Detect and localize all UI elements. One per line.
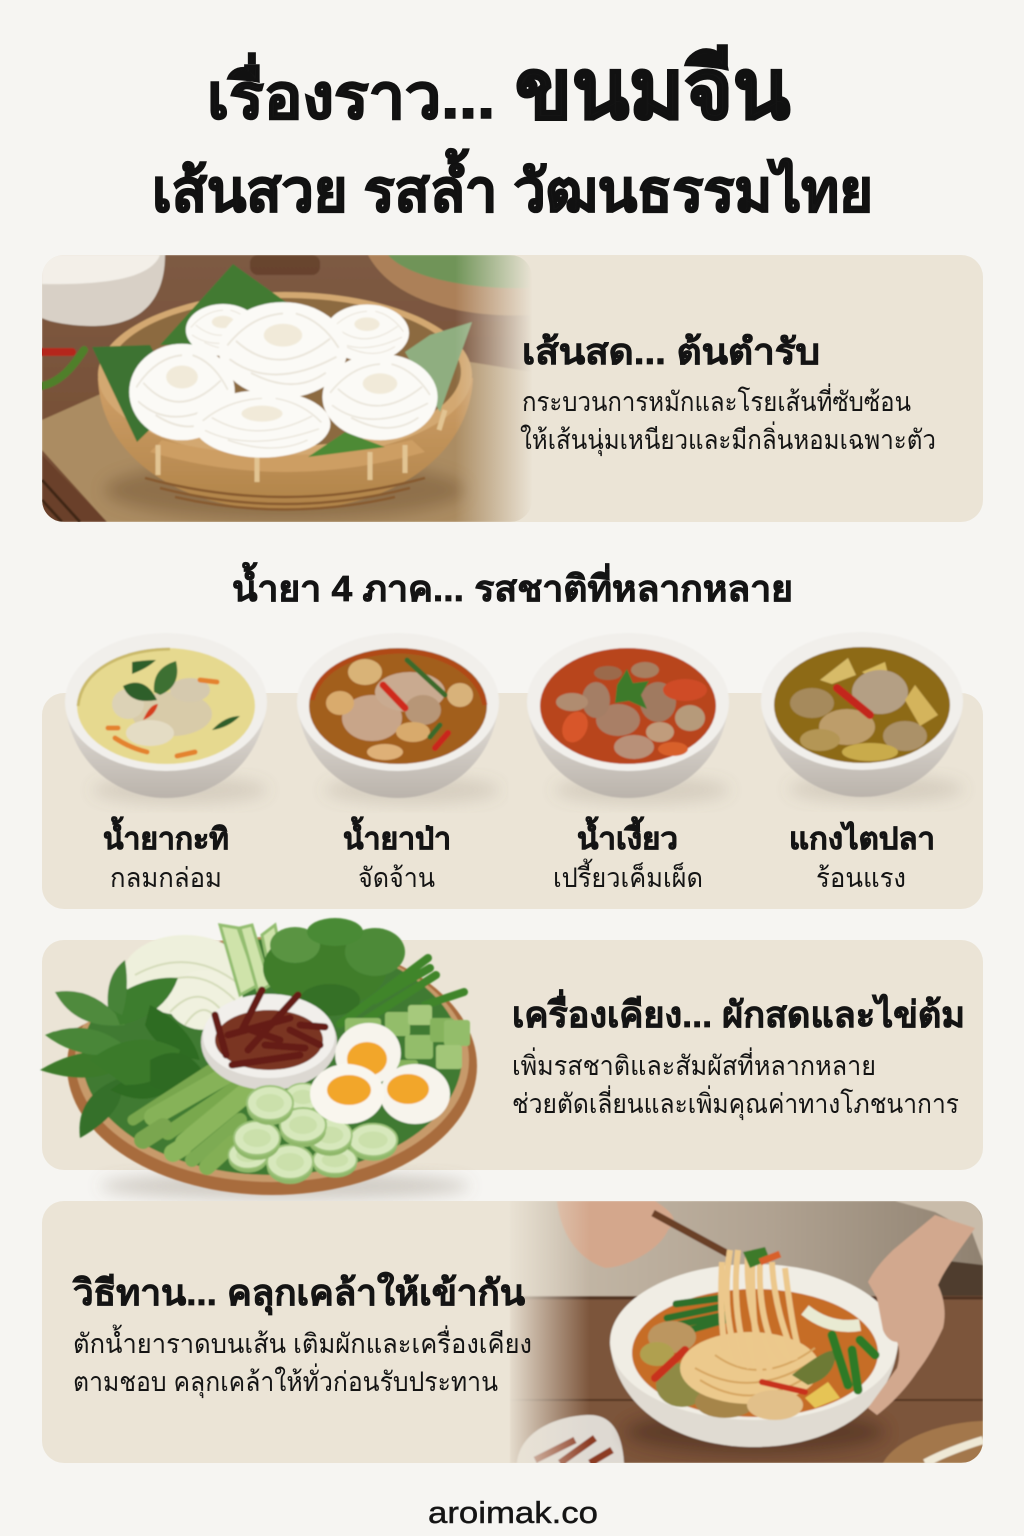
sauce bowl with dried chilies: [201, 990, 337, 1090]
label: jungle curry: น้ำยาป่า: [343, 816, 451, 856]
heading: เส้นสด... ต้นตำรับ: [522, 331, 820, 372]
left hand and chopsticks: [557, 1201, 674, 1268]
small chili bowl: [517, 1415, 624, 1463]
cubed vegetables: [345, 1005, 470, 1078]
title: ขนมจีน: [515, 42, 790, 136]
bowl: nam ngiao: [527, 633, 730, 804]
body text: ตามชอบ คลุกเคล้าให้ทั่วก่อนรับประทาน: [73, 1363, 498, 1399]
heading: วิธีทาน... คลุกเคล้าให้เข้ากัน: [72, 1271, 525, 1316]
label: jungle curry: [343, 816, 451, 893]
footer: website: aroimak.co: [428, 1495, 598, 1530]
curry bowl: [625, 1410, 885, 1454]
panel: side vegetables: [40, 918, 983, 1200]
label: tai pla: แกงไตปลา: [789, 821, 935, 856]
label: coconut curry: [103, 816, 229, 893]
cucumber spears: [220, 925, 285, 995]
body text: ตักน้ำยาราดบนเส้น เติมผักและเครื่องเคียง: [73, 1324, 532, 1359]
photo: mixing bowl: [510, 1201, 983, 1463]
body text: ช่วยตัดเลี่ยนและเพิ่มคุณค่าทางโภชนาการ: [512, 1085, 959, 1121]
bowl: tai pla: [761, 632, 964, 803]
body text: เพิ่มรสชาติและสัมผัสที่หลากหลาย: [512, 1047, 876, 1081]
label: nam ngiao: [553, 816, 703, 893]
label: nam ngiao: เปรี้ยวเค็มเผ็ด: [553, 858, 703, 893]
body text: [73, 1324, 532, 1399]
cabbage: [123, 935, 247, 1030]
body text: [520, 383, 936, 457]
photo: vegetable plate: [40, 918, 477, 1200]
basket: [98, 378, 473, 510]
panel: fresh noodles: [42, 255, 983, 522]
bowl: coconut curry: [65, 633, 268, 804]
lifted noodles: [721, 1250, 800, 1375]
title: [152, 42, 873, 224]
wooden plate and sprouts: [883, 1421, 983, 1463]
label: coconut curry: กลมกล่อม: [110, 863, 222, 893]
long beans: [340, 958, 464, 1030]
label: jungle curry: จัดจ้าน: [358, 863, 435, 893]
herbs: [263, 918, 405, 1016]
noodle nests: [184, 302, 248, 357]
label: tai pla: ร้อนแรง: [816, 863, 906, 893]
photo: noodle basket: [42, 255, 532, 522]
label: nam ngiao: น้ำเงี้ยว: [577, 816, 678, 856]
bowl: jungle curry: [297, 633, 500, 804]
right hand and arm: [868, 1215, 975, 1415]
body text: กระบวนการหมักและโรยเส้นที่ซับซ้อน: [522, 383, 911, 417]
cucumber slices: [228, 1083, 397, 1184]
label: tai pla: [789, 821, 935, 893]
banana leaves: [160, 264, 290, 345]
title: เรื่องราว...: [207, 53, 495, 132]
panel: how to eat: [42, 1201, 983, 1463]
section heading: curries: น้ำยา 4 ภาค... รสชาติที่หลากหลาย: [232, 562, 793, 609]
heading: เครื่องเคียง... ผักสดและไข่ต้ม: [512, 989, 965, 1035]
title: เส้นสวย รสล้ำ วัฒนธรรมไทย: [152, 149, 873, 224]
body text: [512, 1047, 959, 1121]
bean segments: [133, 1070, 253, 1167]
panel: four curries: [42, 632, 983, 909]
body text: ให้เส้นนุ่มเหนียวและมีกลิ่นหอมเฉพาะตัว: [520, 421, 936, 457]
label: coconut curry: น้ำยากะทิ: [103, 816, 229, 856]
boiled eggs: [310, 1016, 450, 1124]
basil: [40, 960, 205, 1138]
